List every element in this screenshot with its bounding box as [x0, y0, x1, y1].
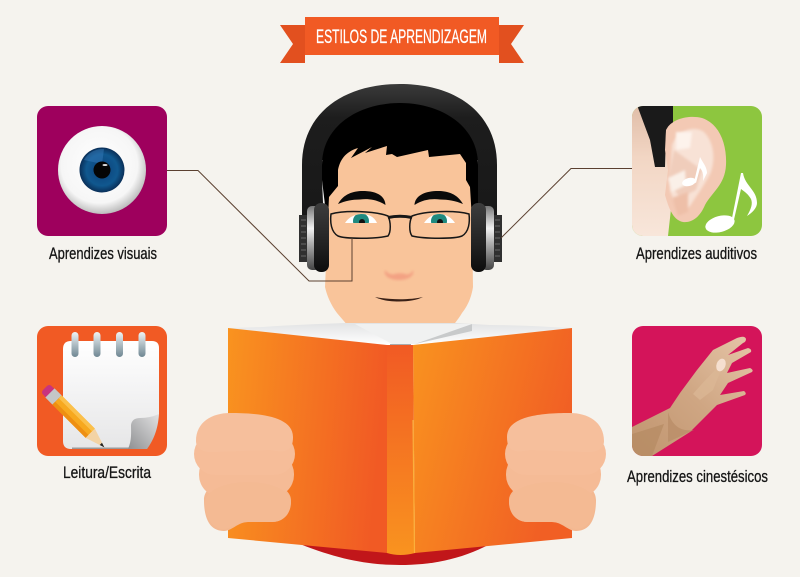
hair [322, 103, 478, 215]
icon: eyeball [58, 126, 146, 214]
icon: pencil [40, 383, 109, 452]
panel: visual learners: Aprendizes visuais [49, 244, 157, 263]
panel: visual learners [37, 106, 167, 263]
panel: reading and writing: Leitura/Escrita [63, 463, 151, 482]
title banner: ESTILOS DE APRENDIZAGEM [316, 26, 487, 48]
title banner [280, 17, 524, 63]
nose [385, 270, 413, 280]
connector: visual panel to eye [167, 170, 352, 281]
panel: auditory learners [632, 105, 762, 263]
eyes [345, 214, 455, 223]
eyebrows [338, 191, 386, 205]
icon: hand [632, 337, 753, 456]
icon: notepad [63, 332, 159, 449]
icon: music notes [681, 157, 757, 236]
mouth [375, 297, 423, 302]
panel: reading and writing [37, 326, 167, 482]
glasses [331, 212, 469, 238]
panel: auditory learners: Aprendizes auditivos [636, 244, 757, 263]
connector: auditory panel to headphone [501, 168, 632, 238]
right hand [505, 413, 606, 531]
figure: person reading [194, 84, 606, 565]
headphone band [302, 84, 497, 218]
shirt [300, 544, 490, 565]
book pages [228, 323, 572, 346]
book cover [228, 328, 572, 555]
panel: kinesthetic learners [627, 326, 768, 486]
face [325, 146, 473, 335]
right ear cup [471, 203, 502, 272]
icon: ear [632, 105, 726, 236]
left hand [194, 413, 295, 531]
left ear cup [299, 203, 329, 272]
